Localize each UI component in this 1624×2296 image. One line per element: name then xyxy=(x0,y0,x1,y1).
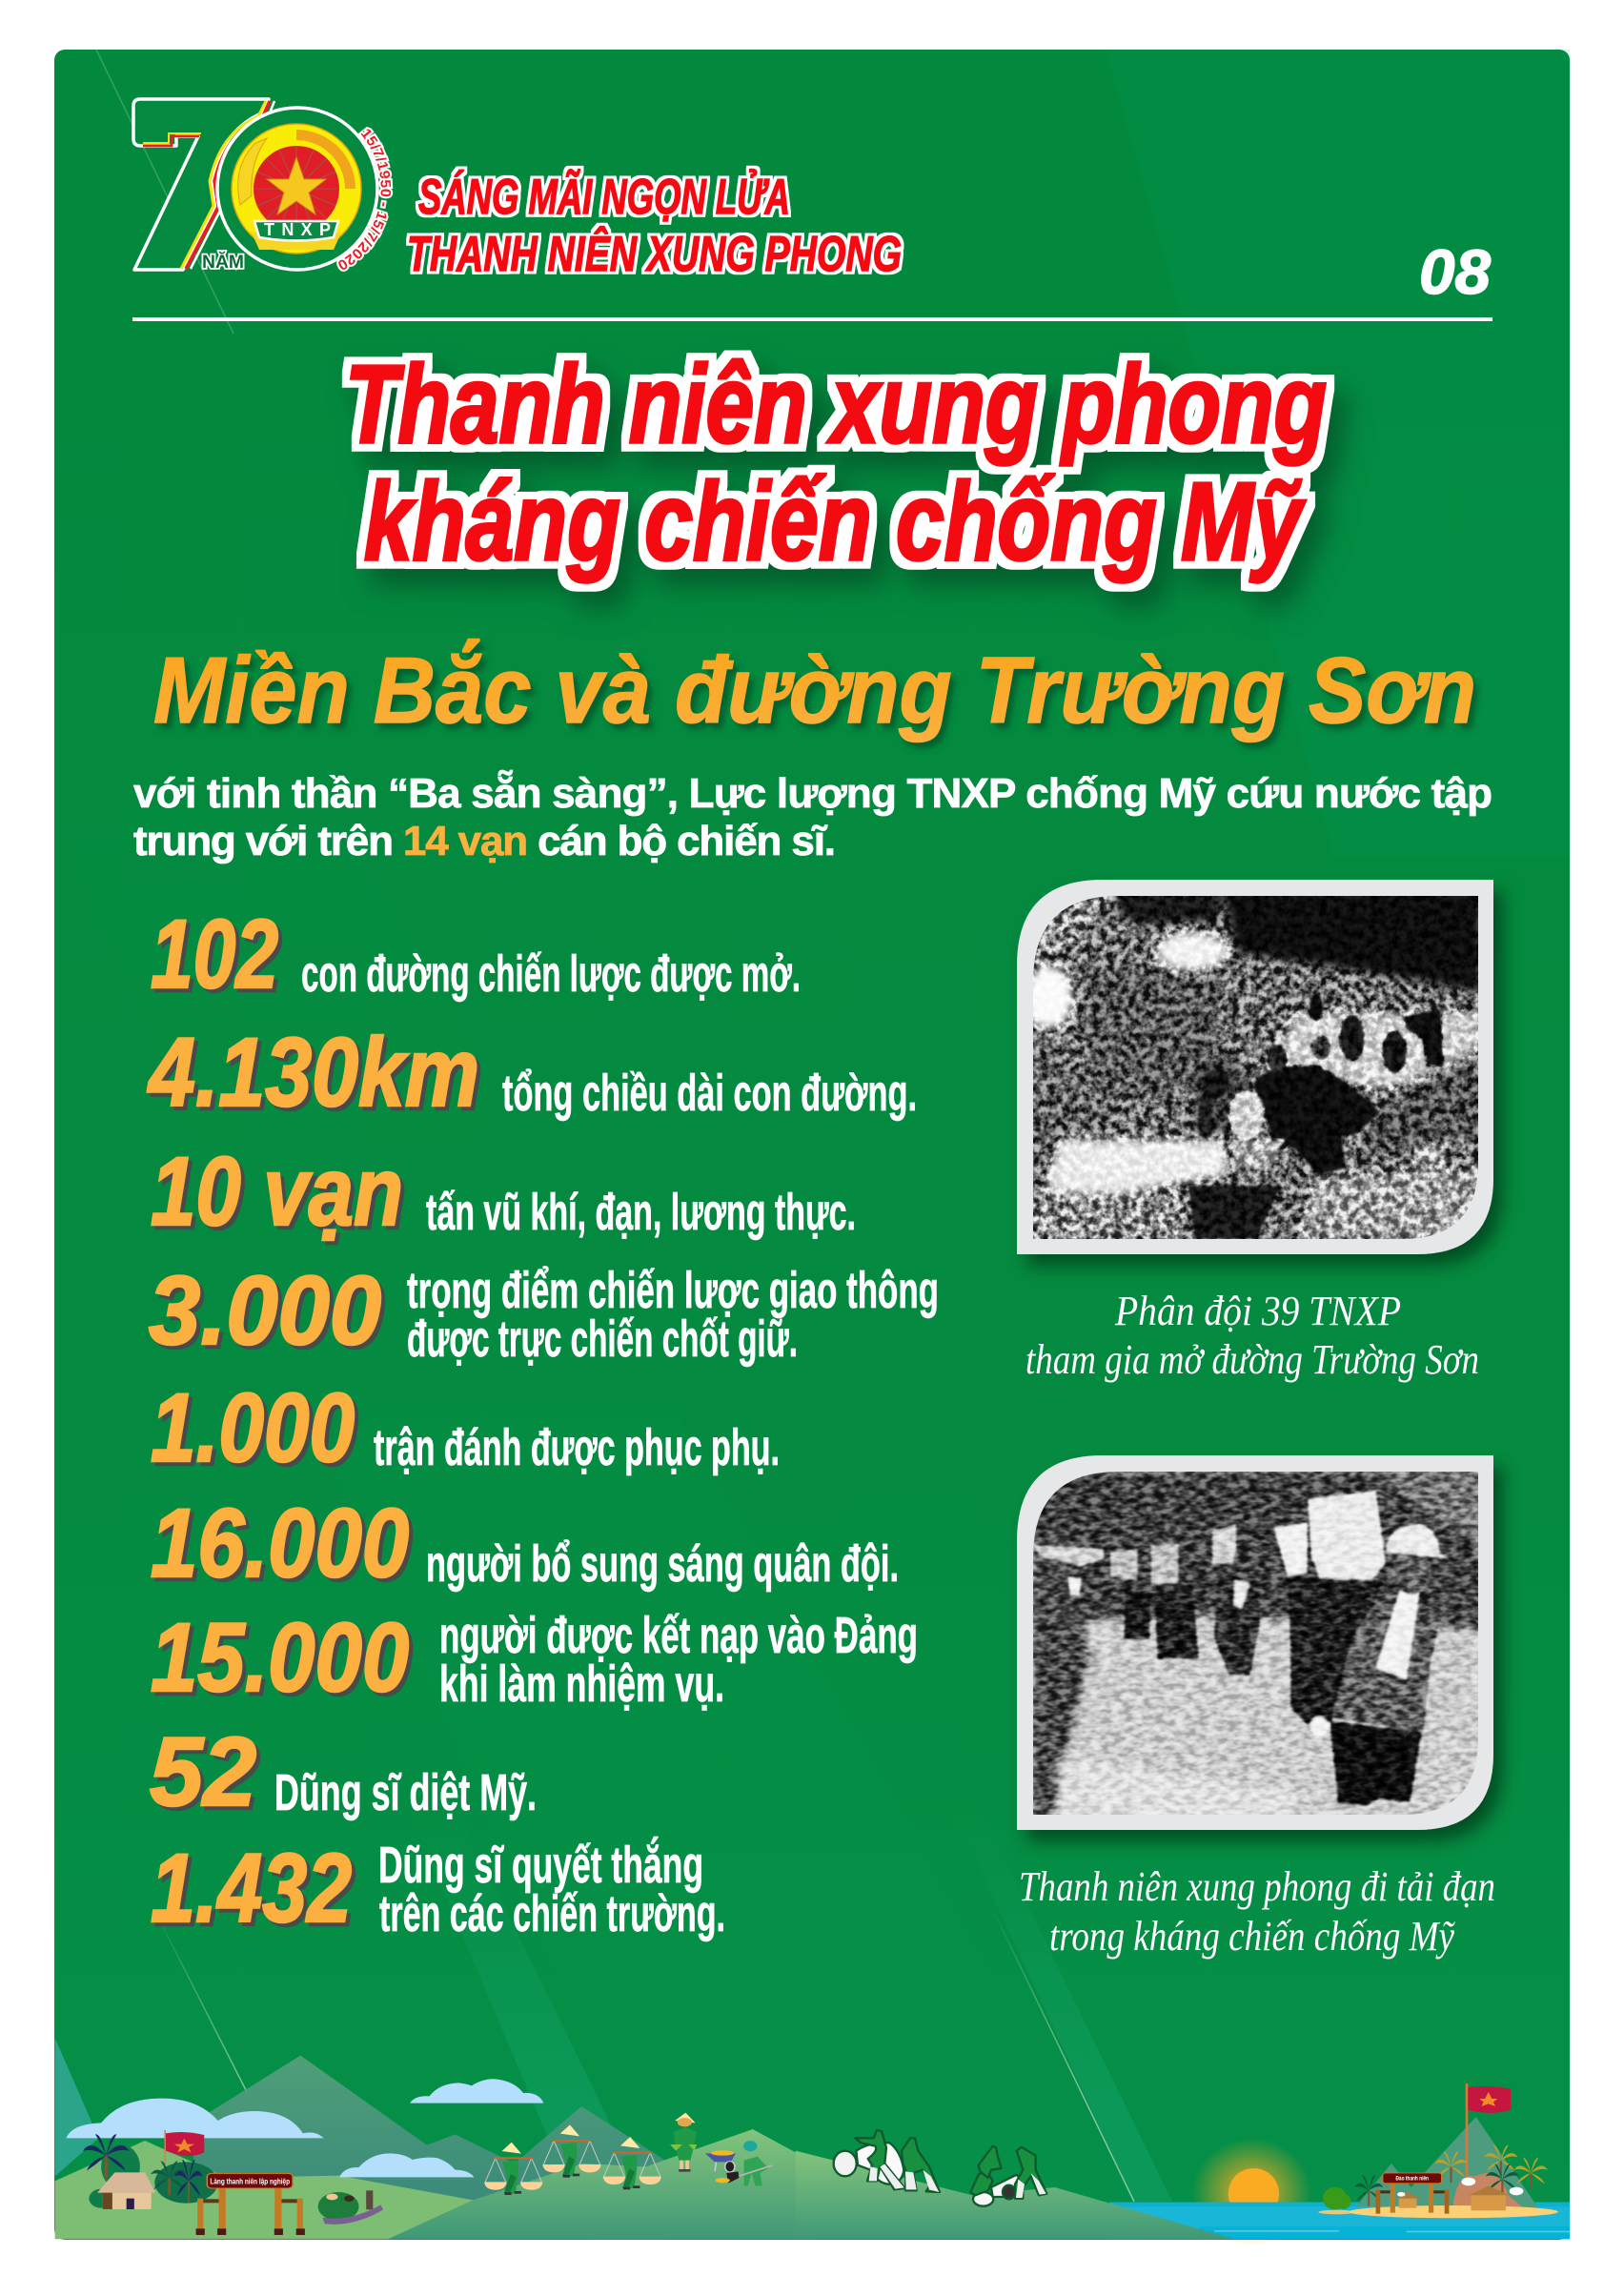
stat: 4130 km: tổng chiều dài con đường. xyxy=(502,1065,917,1122)
illustration: hill, sea and island, right xyxy=(796,2083,1570,2246)
village gate: Làng thanh niên lập nghiệp xyxy=(210,2177,290,2186)
stat: 3000 key points: được trực chiến chốt giữ. xyxy=(407,1311,798,1368)
illustration: mountain landscape, left xyxy=(55,2038,810,2239)
stat: 102 roads: con đường chiến lược được mở. xyxy=(301,945,801,1003)
slogan: SÁNG MÃI NGỌN LỬA xyxy=(418,169,790,225)
stat: 1000 battles: 1.000 xyxy=(151,1373,355,1482)
worker with wheelbarrow xyxy=(705,2141,772,2185)
title xyxy=(345,342,1327,583)
cloud small right xyxy=(410,2079,543,2103)
stat: 1000 battles xyxy=(151,1373,780,1482)
stat: 10 van tons: 10 vạn xyxy=(151,1137,403,1246)
woman in conical hat xyxy=(670,2113,697,2172)
seated group xyxy=(318,2190,383,2225)
stat: 102 roads: 102 xyxy=(151,900,278,1008)
stat: 3000 key points xyxy=(149,1256,939,1368)
stat: 16000 recruits: 16.000 xyxy=(151,1489,409,1597)
stat list xyxy=(147,900,939,1942)
stat: 16000 recruits xyxy=(151,1489,899,1597)
cloud middle xyxy=(339,2153,474,2177)
stat: 1432 victors xyxy=(151,1834,725,1942)
ring and badge xyxy=(217,108,377,270)
stat: 3000 key points: 3.000 xyxy=(149,1256,381,1365)
slogan: THANH NIÊN XUNG PHONG xyxy=(407,226,902,282)
caption: first photo: tham gia mở đường Trường Sơn xyxy=(1025,1336,1479,1383)
caption: first photo xyxy=(1025,1288,1479,1383)
far mountains xyxy=(193,2056,675,2239)
stat: 15000 party members: khi làm nhiệm vụ. xyxy=(439,1656,724,1713)
title: kháng chiến chống Mỹ xyxy=(364,459,1306,583)
right hill xyxy=(388,2129,810,2239)
stat: 4130 km xyxy=(147,1018,917,1127)
stilt house xyxy=(97,2172,155,2209)
anniversary dates on arc xyxy=(339,133,381,261)
intro paragraph: trung với trên 14 vạn cán bộ chiến sĩ. xyxy=(133,818,836,864)
island with mountains xyxy=(1318,2083,1558,2218)
village gate xyxy=(196,2173,305,2235)
caption: second photo xyxy=(1019,1863,1495,1960)
sea xyxy=(1109,2203,1570,2239)
stat: 52 heroes: 52 xyxy=(150,1717,256,1826)
motorbike group two xyxy=(970,2146,1046,2206)
motorbike convoys xyxy=(834,2130,1046,2206)
caption: second photo: trong kháng chiến chống Mỹ xyxy=(1049,1913,1455,1960)
teal slope xyxy=(55,2038,99,2176)
logo: 70 years emblem: 15/7/1950 - 15/7/2020 xyxy=(336,127,393,272)
slogan xyxy=(407,169,902,282)
stat: 52 heroes: Dũng sĩ diệt Mỹ. xyxy=(274,1764,537,1821)
hill slope xyxy=(796,2151,1234,2239)
ring and badge: TNXP xyxy=(264,220,331,239)
page number: 08 xyxy=(1419,236,1491,307)
stat: 10 van tons: tấn vũ khí, đạn, lương thực. xyxy=(426,1184,856,1241)
stat: 16000 recruits: người bổ sung sáng quân đội. xyxy=(426,1535,899,1593)
island gate: Đảo thanh niên xyxy=(1395,2174,1429,2182)
stat: 1000 battles: trận đánh được phục phụ. xyxy=(374,1419,780,1476)
intro paragraph: với tinh thần “Ba sẵn sàng”, Lực lượng TNXP chống Mỹ cứu nước tập xyxy=(133,768,1492,817)
stat: 52 heroes xyxy=(150,1717,537,1826)
logo: 70 years emblem xyxy=(132,97,393,273)
stat: 15000 party members: 15.000 xyxy=(151,1603,409,1712)
caption: first photo: Phân đội 39 TNXP xyxy=(1114,1288,1401,1334)
stat: 1432 victors: Dũng sĩ quyết thắng xyxy=(378,1837,703,1894)
intro paragraph xyxy=(133,768,1492,864)
cloud large xyxy=(66,2099,324,2138)
stat: 1432 victors: trên các chiến trường. xyxy=(379,1885,725,1942)
caption: second photo: Thanh niên xung phong đi tải đạn xyxy=(1019,1863,1495,1910)
stat: 15000 party members xyxy=(151,1603,918,1713)
stat: 3000 key points: trọng điểm chiến lược giao thông xyxy=(407,1262,939,1319)
photo: carrying ammunition xyxy=(1017,1455,1493,1830)
palms and bushes xyxy=(83,2134,218,2208)
sun xyxy=(1192,2138,1311,2246)
stat: 1432 victors: 1.432 xyxy=(151,1834,352,1942)
stat: 15000 party members: người được kết nạp vào Đảng xyxy=(439,1607,918,1664)
photo: opening Truong Son road xyxy=(1017,880,1493,1254)
porters with shoulder poles xyxy=(484,2124,661,2195)
title: Thanh niên xung phong xyxy=(345,342,1327,466)
subtitle: Miền Bắc và đường Trường Sơn xyxy=(153,638,1476,742)
island gate xyxy=(1376,2173,1449,2214)
stat: 10 van tons xyxy=(151,1137,856,1246)
foreground hill xyxy=(55,2141,473,2239)
stat: 4130 km: 4.130km xyxy=(147,1018,479,1127)
digit seven outline xyxy=(133,99,274,270)
motorbike group one xyxy=(834,2130,940,2192)
label nam: NĂM xyxy=(202,252,244,273)
island flag xyxy=(1466,2083,1511,2179)
village flag xyxy=(164,2130,204,2166)
stat: 102 roads xyxy=(151,900,801,1008)
